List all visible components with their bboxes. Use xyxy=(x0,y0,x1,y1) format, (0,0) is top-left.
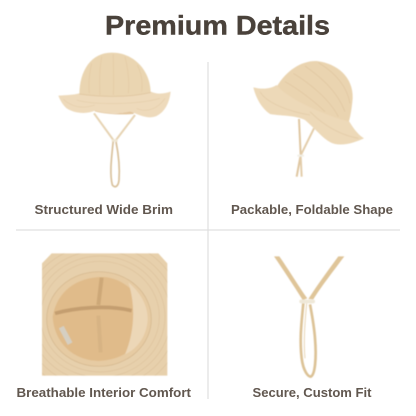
panel: wide brim hat front view xyxy=(58,53,171,187)
label: interior comfort: Breathable Interior Comfort xyxy=(16,385,192,400)
panel: adjustable strap xyxy=(274,256,344,377)
panel: hat interior xyxy=(42,252,168,376)
toggle xyxy=(299,300,315,303)
chin strap xyxy=(94,113,135,187)
interior crown xyxy=(47,272,151,366)
label: foldable shape: Packable, Foldable Shape xyxy=(231,202,393,217)
title: Premium Details xyxy=(105,10,330,40)
panel: foldable hat side view xyxy=(253,61,364,177)
chin strap xyxy=(297,119,314,177)
label: wide brim: Structured Wide Brim xyxy=(34,202,173,217)
care tag xyxy=(59,326,72,345)
label: custom fit: Secure, Custom Fit xyxy=(252,385,372,400)
